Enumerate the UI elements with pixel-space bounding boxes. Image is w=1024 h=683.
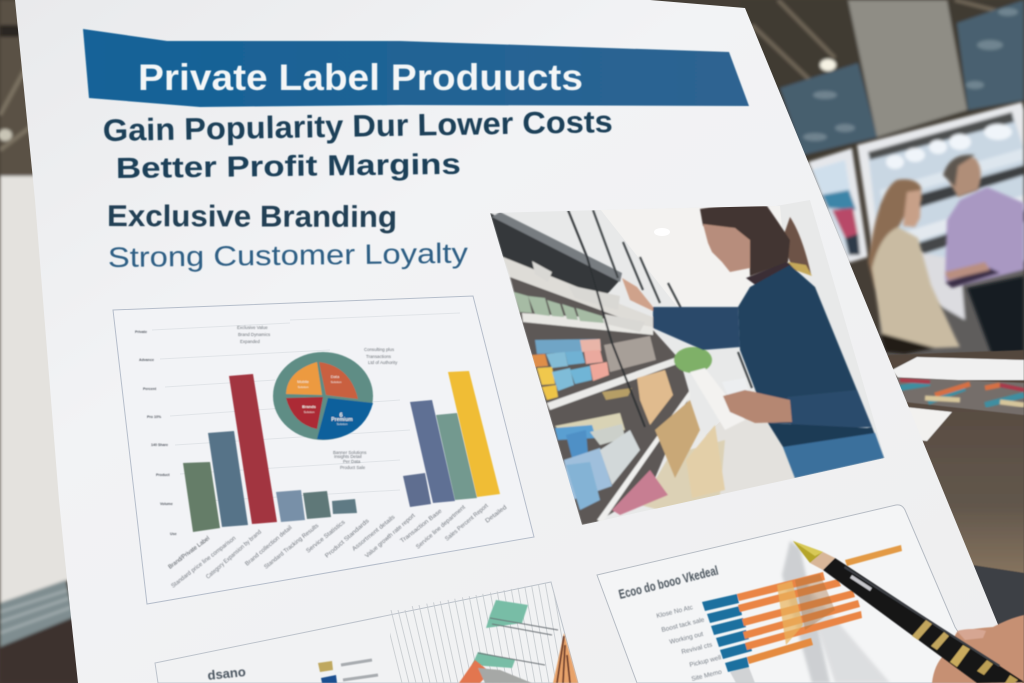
panel: bottom-right chart (597, 505, 990, 683)
chart annotations: Expanded (240, 339, 260, 344)
panel: bottom-left chart (155, 582, 578, 683)
x axis labels: Transaction Base (400, 508, 444, 545)
pie chart: Brands (302, 404, 317, 409)
pie chart: Solution (304, 410, 315, 414)
chart annotations: Transactions (366, 354, 392, 359)
small display (808, 148, 868, 263)
heading text: Gain Popularity Dur Lower Costs (103, 104, 613, 148)
heading text: Exclusive Branding (107, 200, 397, 234)
chart annotations: Ltd of Authority (368, 360, 398, 365)
x axis labels: Standard price line comparison (171, 536, 237, 590)
chart annotations: Insights Detail (334, 454, 362, 459)
row labels: Working out (669, 631, 704, 646)
pie chart (273, 352, 373, 440)
stacked bars (702, 545, 902, 672)
fold shadow (782, 541, 830, 683)
x axis labels: Sales Percent Report (444, 503, 490, 543)
floor behind people (880, 260, 1024, 360)
pie chart: 6 (339, 413, 343, 419)
pie chart: Mobile (297, 379, 310, 384)
chart annotations: Exclusive Value (237, 325, 268, 330)
y axis labels: 140 Share (151, 443, 168, 447)
row labels: Revival cts (681, 641, 714, 656)
green bars (472, 600, 558, 668)
row labels (656, 604, 723, 683)
y axis labels: Pro 10% (147, 415, 162, 419)
chart annotations: Per Data (343, 459, 361, 464)
y axis labels (135, 330, 177, 536)
x axis labels (168, 503, 508, 590)
chart annotations: Banner Solutions (333, 450, 367, 455)
bars (183, 371, 500, 532)
store shelves (490, 210, 752, 525)
chart annotations (237, 325, 398, 470)
pen pointer (793, 541, 1024, 683)
pie chart: Solution (337, 422, 348, 426)
chart title: Ecoo do booo Vkedeal (617, 564, 720, 602)
row labels: Boost tack sale (661, 616, 706, 634)
x axis labels: Brand/Private Label (168, 536, 211, 571)
lower colour shapes (459, 660, 532, 683)
y axis labels: Advance (139, 358, 154, 362)
striped peak (553, 633, 578, 683)
y axis labels: Volume (160, 502, 173, 506)
heading text: Strong Customer Loyalty (108, 238, 468, 273)
x axis labels: Detailed (485, 505, 508, 525)
legend (318, 660, 378, 683)
chart title: dsano (207, 664, 246, 683)
x axis labels: Service Statistics (305, 520, 347, 555)
pie chart: Data (331, 374, 340, 379)
pie chart: Solution (331, 380, 342, 384)
y axis labels: Use (170, 532, 177, 536)
panel: bar chart card (113, 296, 534, 604)
x axis labels: Category Expansion by brand (205, 529, 263, 581)
panel: store photo (490, 200, 885, 525)
large display (857, 102, 1024, 300)
heading text: Better Profit Margins (116, 149, 461, 185)
table (885, 350, 1024, 683)
banner title: Private Label Produucts (138, 57, 583, 98)
pie chart: Premium (331, 417, 353, 423)
row labels: Site Memo (691, 669, 723, 683)
x axis labels: Product Standards (324, 518, 371, 560)
background people (868, 155, 1024, 358)
x axis labels: Brand collection detail (244, 525, 293, 568)
pie chart: Solution (298, 385, 309, 389)
row labels: Pickup well (689, 654, 723, 669)
chart annotations: Product Sale (340, 465, 366, 470)
left background (0, 0, 84, 683)
banner (83, 29, 749, 107)
y axis labels: Private (135, 330, 147, 334)
right background (740, 0, 1024, 170)
x axis labels: Standard Tracking Results (263, 523, 320, 571)
hand (932, 615, 1024, 683)
x axis labels: Value growth rate report (364, 513, 417, 560)
y axis labels: Product (156, 473, 170, 477)
x axis labels: Assortment details (351, 515, 396, 553)
chart annotations: Brand Dynamics (238, 332, 271, 337)
heading text (103, 104, 613, 273)
row labels: Klose No Atc (656, 604, 694, 620)
chart annotations: Consulting plus (364, 347, 395, 352)
woman (622, 205, 884, 478)
hatching (384, 582, 570, 683)
y axis labels: Percent (143, 387, 157, 391)
products (514, 261, 725, 515)
x axis labels: Service line department (415, 504, 467, 551)
